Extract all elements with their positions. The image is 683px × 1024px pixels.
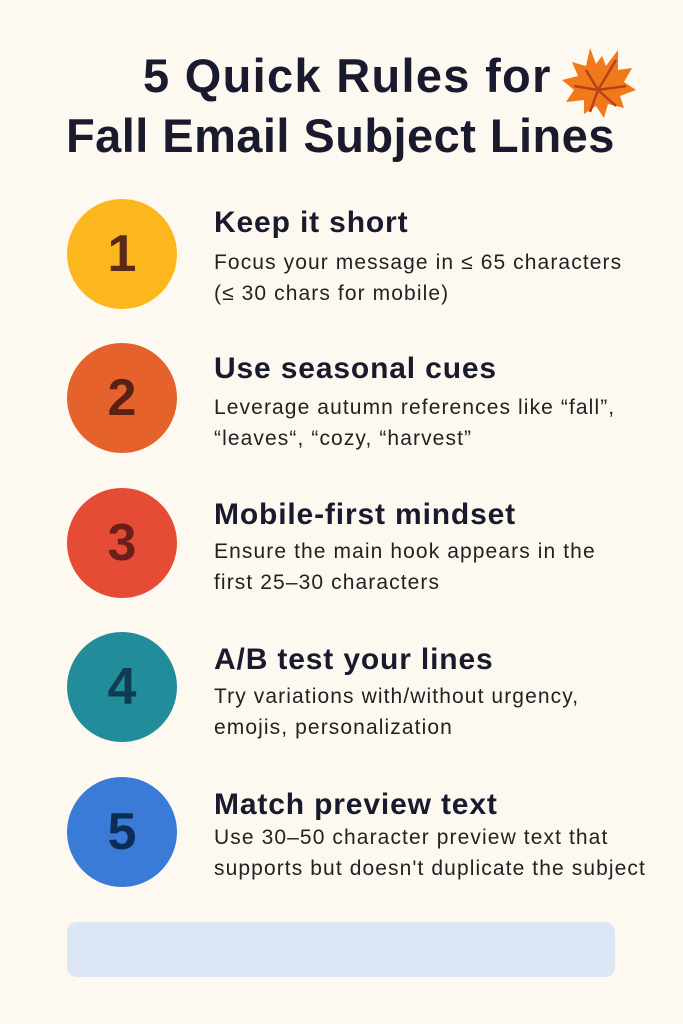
title: Fall Email Subject Lines bbox=[66, 109, 615, 162]
body 4: emojis, personalization bbox=[214, 716, 453, 739]
item 1 bbox=[67, 199, 622, 309]
body 3: first 25–30 characters bbox=[214, 571, 440, 594]
item 5 bbox=[67, 777, 646, 887]
heading 2: Use seasonal cues bbox=[214, 352, 497, 385]
body 2 bbox=[214, 396, 615, 450]
circle 2: 2 bbox=[108, 369, 136, 427]
heading 1: Keep it short bbox=[214, 206, 408, 239]
item 3 bbox=[67, 488, 596, 598]
body 4: Try variations with/without urgency, bbox=[214, 685, 579, 708]
title: 5 Quick Rules for bbox=[143, 49, 552, 102]
item 4 bbox=[67, 632, 579, 742]
body 2: “leaves“, “cozy, “harvest” bbox=[214, 427, 472, 450]
icon: maple leaf bbox=[562, 48, 636, 118]
body 3: Ensure the main hook appears in the bbox=[214, 540, 596, 563]
circle 5 bbox=[67, 777, 177, 887]
body 1: Focus your message in ≤ 65 characters bbox=[214, 251, 622, 274]
body 2: Leverage autumn references like “fall”, bbox=[214, 396, 615, 419]
body 5 bbox=[214, 826, 646, 880]
heading 5: Match preview text bbox=[214, 788, 498, 821]
circle 2 bbox=[67, 343, 177, 453]
item 2 bbox=[67, 343, 615, 453]
title bbox=[66, 49, 615, 162]
circle 3: 3 bbox=[108, 514, 136, 572]
body 5: supports but doesn't duplicate the subject bbox=[214, 857, 646, 880]
circle 3 bbox=[67, 488, 177, 598]
circle 4 bbox=[67, 632, 177, 742]
circle 4: 4 bbox=[108, 658, 136, 716]
circle 5: 5 bbox=[108, 803, 136, 861]
circle 1: 1 bbox=[108, 225, 136, 283]
body 5: Use 30–50 character preview text that bbox=[214, 826, 608, 849]
heading 4: A/B test your lines bbox=[214, 643, 494, 676]
body 1 bbox=[214, 251, 622, 305]
footer bar bbox=[67, 922, 615, 977]
heading 3: Mobile-first mindset bbox=[214, 498, 516, 531]
circle 1 bbox=[67, 199, 177, 309]
body 3 bbox=[214, 540, 596, 594]
body 1: (≤ 30 chars for mobile) bbox=[214, 282, 449, 305]
body 4 bbox=[214, 685, 579, 739]
